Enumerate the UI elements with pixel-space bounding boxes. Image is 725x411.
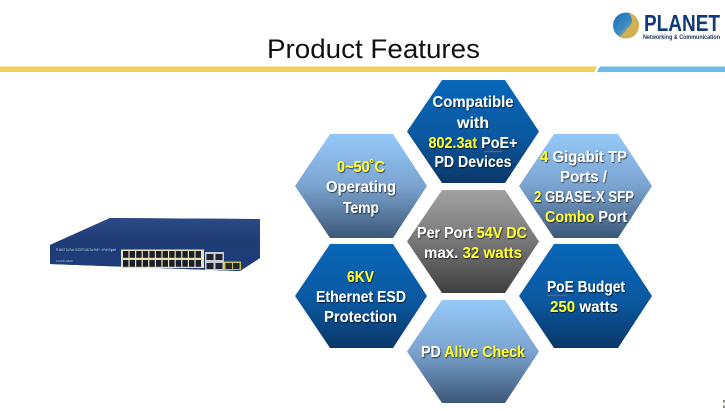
hexagon: compatible with 802.3at PoE+ PD devices: Compatible xyxy=(432,94,514,111)
page number marks xyxy=(723,400,725,408)
hexagon: gigabit TP ports and SFP combo: 2 GBASE-X SFP xyxy=(534,189,634,206)
hexagon: operating temperature xyxy=(295,134,427,238)
title: Product Features xyxy=(267,34,480,64)
hexagon: 6KV ethernet ESD protection xyxy=(295,244,427,348)
hexagon: operating temperature: Operating xyxy=(326,179,396,196)
hexagon: per port 54V DC max 32 watts: max. 32 watts xyxy=(424,245,522,262)
hexagon: PoE budget 250 watts: PoE Budget xyxy=(547,279,625,296)
hexagon: compatible with 802.3at PoE+ PD devices: 802.3at PoE+ xyxy=(428,135,518,152)
hexagon: operating temperature: 0~50˚C xyxy=(337,159,385,176)
hexagon: compatible with 802.3at PoE+ PD devices: PD Devices xyxy=(434,154,512,171)
hexagon: 6KV ethernet ESD protection: Protection xyxy=(324,309,397,326)
hexagon: operating temperature: Temp xyxy=(343,200,379,217)
hexagon: per port 54V DC max 32 watts: Per Port 54V DC xyxy=(417,225,527,242)
hexagon: gigabit TP ports and SFP combo: 4 Gigabit TP xyxy=(540,149,627,166)
hexagon: 6KV ethernet ESD protection: 6KV xyxy=(347,269,375,286)
hexagon: gigabit TP ports and SFP combo: Ports / xyxy=(560,169,608,186)
hexagon: PD alive check xyxy=(407,300,539,403)
hexagon: PD alive check: PD Alive Check xyxy=(421,344,525,361)
network switch product image xyxy=(50,218,260,271)
network switch product image: PLANET 24-Port 10/100TX 802.3at PoE + 4-Port Gigabit xyxy=(56,248,116,252)
hexagon: gigabit TP ports and SFP combo xyxy=(519,134,652,238)
hexagon: compatible with 802.3at PoE+ PD devices: with xyxy=(456,115,489,132)
hexagon: gigabit TP ports and SFP combo: Combo Port xyxy=(545,209,627,226)
hexagon: compatible with 802.3at PoE+ PD devices xyxy=(407,80,539,183)
hexagon: PoE budget 250 watts: 250 watts xyxy=(550,299,618,316)
hexagon: PoE budget 250 watts xyxy=(519,244,652,348)
header rule: yellow and blue bar xyxy=(0,66,725,72)
network switch product image: FGSW-2620 xyxy=(56,259,73,263)
hexagon: per port 54V DC max 32 watts xyxy=(407,190,539,293)
hexagon: 6KV ethernet ESD protection: Ethernet ESD xyxy=(316,289,406,306)
logo: PLANET xyxy=(613,10,720,41)
